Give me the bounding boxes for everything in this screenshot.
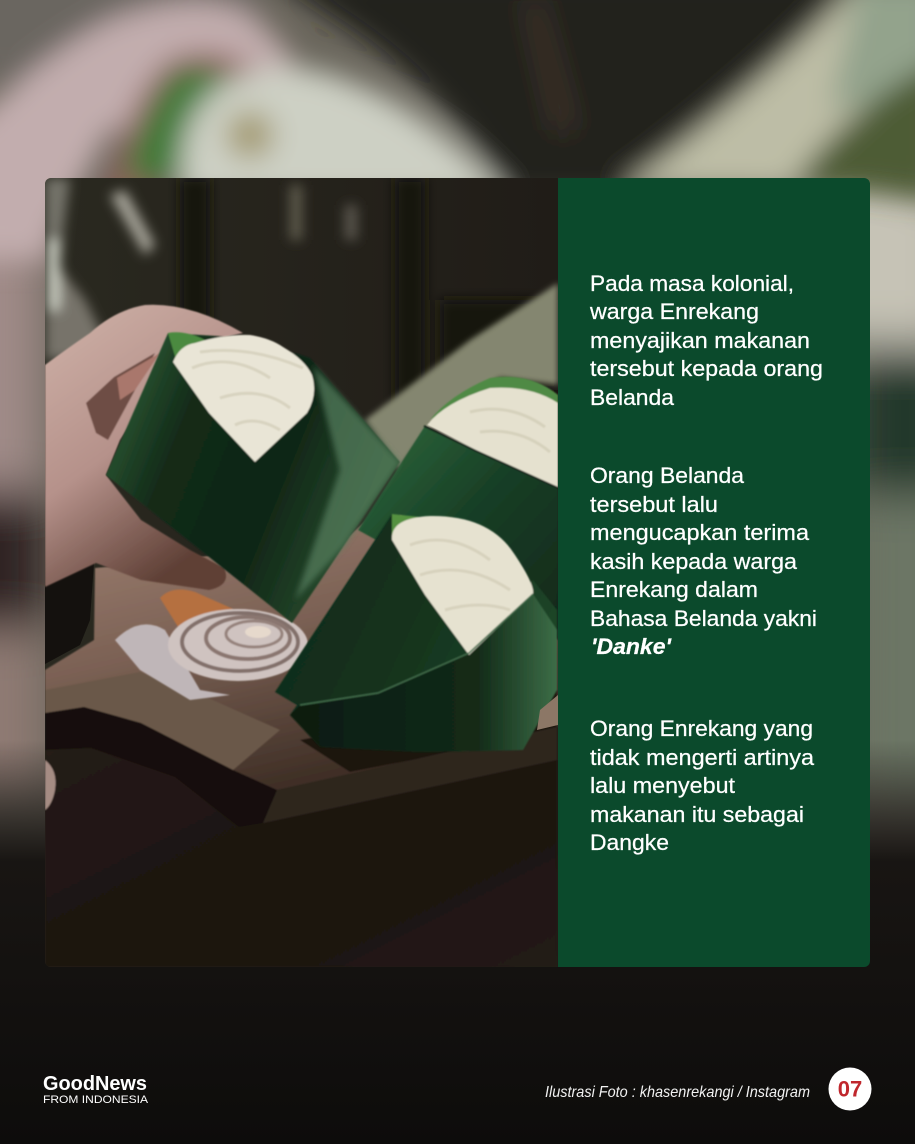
water ripple on the ledge (115, 590, 308, 700)
text block: Dutch thanks (590, 463, 817, 659)
logo: GoodNews from Indonesia: FROM INDONESIA (43, 1094, 149, 1106)
rice (180, 68, 510, 200)
text block: Dutch thanks: Enrekang dalam (590, 577, 758, 602)
wood on the right edge (537, 695, 558, 730)
text block: Dutch thanks: Orang Belanda (590, 463, 744, 488)
text block: colonial period: menyajikan makanan (590, 328, 810, 353)
text block: origin of the name: Dangke (590, 830, 669, 855)
cone: held in hand (106, 332, 400, 623)
right side (800, 164, 915, 345)
pale hand arc (0, 2, 310, 260)
green leaf (125, 67, 240, 180)
dark shape under the hand (45, 562, 94, 664)
text block: origin of the name: tidak mengerti artinya (590, 745, 814, 770)
text block: origin of the name: Orang Enrekang yang (590, 716, 813, 741)
wooden ledge (45, 490, 558, 967)
text block: Dutch thanks: mengucapkan terima (590, 520, 809, 545)
page number badge (828, 1068, 872, 1110)
panel: green text panel (558, 178, 870, 967)
photo panel: hand holding dangke wrapped in banana leaf (45, 178, 558, 967)
cone: front (275, 514, 557, 752)
photo credit: Ilustrasi Foto : khasenrekangi / Instagram (545, 1084, 810, 1101)
text block: colonial period: warga Enrekang (589, 299, 759, 324)
logo: GoodNews from Indonesia: GoodNews (43, 1073, 147, 1095)
mossy beam (365, 283, 558, 470)
cone: back right (358, 377, 558, 640)
text block: colonial period: Pada masa kolonial, (590, 271, 794, 296)
text block: colonial period: Belanda (590, 385, 674, 410)
text block: origin of the name: lalu menyebut (590, 773, 736, 798)
text block: Dutch thanks: 'Danke' (591, 634, 672, 659)
top-left corner (0, 0, 260, 80)
page number badge: 07 (838, 1076, 862, 1102)
logo: GoodNews from Indonesia (43, 1073, 149, 1106)
text block: origin of the name (590, 716, 814, 855)
right pale band (620, 0, 915, 190)
text block: Dutch thanks: tersebut lalu (590, 492, 718, 517)
text block: colonial period: tersebut kepada orang (590, 356, 823, 381)
text block: Dutch thanks: kasih kepada warga (590, 549, 797, 574)
text block: Dutch thanks: Bahasa Belanda yakni (590, 606, 817, 631)
left side (0, 120, 45, 490)
text block: colonial period (589, 271, 823, 410)
hand (45, 305, 243, 590)
dark V (262, 0, 860, 200)
text block: origin of the name: makanan itu sebagai (590, 802, 804, 827)
forest backdrop (45, 178, 556, 396)
